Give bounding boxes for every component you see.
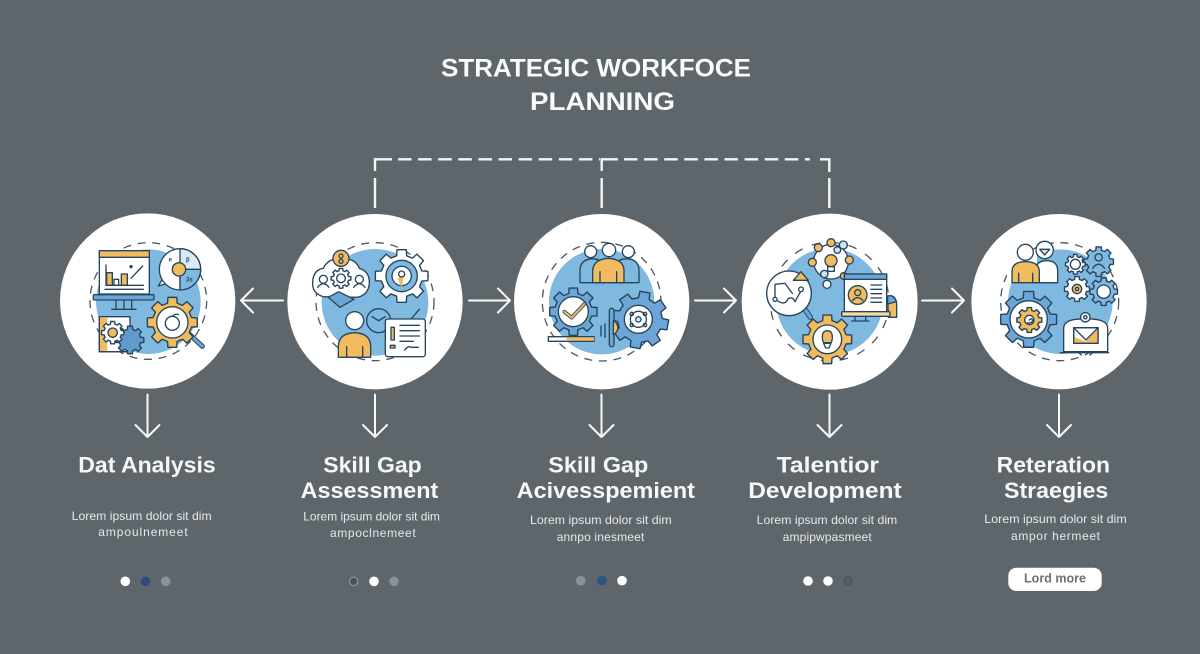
pagination dots: step 2	[350, 576, 399, 586]
text block: step 2 description: Lorem ipsum dolor sit dim	[303, 510, 440, 524]
title	[441, 54, 751, 116]
pagination dots: step 4	[803, 576, 852, 586]
text block: step 4 description: Lorem ipsum dolor sit dim	[757, 513, 897, 527]
panel: step 3 skill gap achievement	[514, 214, 696, 585]
heading: step 4: Development	[748, 478, 902, 503]
panel: step 5 retention strategies	[971, 214, 1147, 591]
text block: step 1 description: ampoulnemeet	[98, 525, 188, 539]
arrow: step 2 back to step 1	[241, 288, 283, 312]
text block: step 1 description: Lorem ipsum dolor sit dim	[72, 509, 212, 523]
icon: talent development badge	[742, 214, 918, 390]
heading: step 2	[301, 452, 439, 503]
heading: step 3	[517, 452, 696, 503]
arrow: step 2 to step 3	[469, 288, 510, 312]
arrow: down to step 5 text	[1047, 394, 1071, 437]
title: STRATEGIC WORKFOCE	[441, 54, 751, 82]
text block: step 5 description: Lorem ipsum dolor sit dim	[984, 512, 1127, 526]
heading: step 4: Talentior	[777, 452, 879, 477]
pagination dots: step 1	[120, 576, 170, 586]
heading: step 1: Dat Analysis	[78, 452, 216, 477]
arrow: down to step 1 text	[136, 394, 160, 437]
button: load more	[1008, 568, 1102, 591]
arrow: step 3 to step 4	[695, 288, 736, 312]
text block: step 5 description	[984, 512, 1127, 543]
icon: skill gap assessment badge	[287, 214, 463, 389]
text block: step 3 description: annpo inesmeet	[557, 530, 645, 544]
heading: step 2: Assessment	[301, 478, 439, 503]
heading: step 3: Acivesspemient	[517, 478, 696, 503]
arrow: down to step 4 text	[818, 394, 842, 437]
icon: data analysis badge: 3s	[186, 277, 193, 283]
text block: step 4 description: ampipwpasmeet	[783, 530, 872, 544]
text block: step 4 description	[757, 513, 897, 544]
arrow: down to step 3 text	[590, 394, 614, 437]
arrow: down to step 2 text	[363, 394, 387, 437]
icon: retention strategies badge	[971, 214, 1147, 389]
title: PLANNING	[530, 88, 675, 116]
panel: step 4 talent development	[742, 214, 918, 586]
pagination dots: step 3	[576, 576, 627, 586]
icon: skill gap achievement badge	[514, 214, 689, 389]
text block: step 3 description: Lorem ipsum dolor sit dim	[530, 513, 672, 527]
arrow: step 4 to step 5	[922, 288, 964, 312]
text block: step 2 description: ampoclnemeet	[330, 526, 416, 540]
heading: step 5	[997, 453, 1110, 503]
dashed connector linking steps 2, 3 and 4	[375, 159, 829, 208]
text block: step 2 description	[303, 510, 440, 540]
icon: data analysis badge	[60, 213, 235, 389]
icon: data analysis badge: β	[186, 257, 190, 263]
panel: step 1 data analysis	[60, 213, 235, 586]
text block: step 3 description	[530, 513, 672, 544]
text block: step 1 description	[72, 509, 212, 539]
icon: data analysis badge: e	[169, 257, 173, 263]
button: load more: Lord more	[1024, 572, 1086, 586]
panel: step 2 skill gap assessment	[287, 214, 463, 586]
heading: step 4	[748, 452, 902, 503]
heading: step 2: Skill Gap	[323, 452, 422, 477]
heading: step 3: Skill Gap	[548, 452, 648, 477]
text block: step 5 description: ampor hermeet	[1011, 529, 1101, 543]
heading: step 5: Straegies	[1004, 478, 1108, 503]
heading: step 5: Reteration	[997, 453, 1110, 478]
